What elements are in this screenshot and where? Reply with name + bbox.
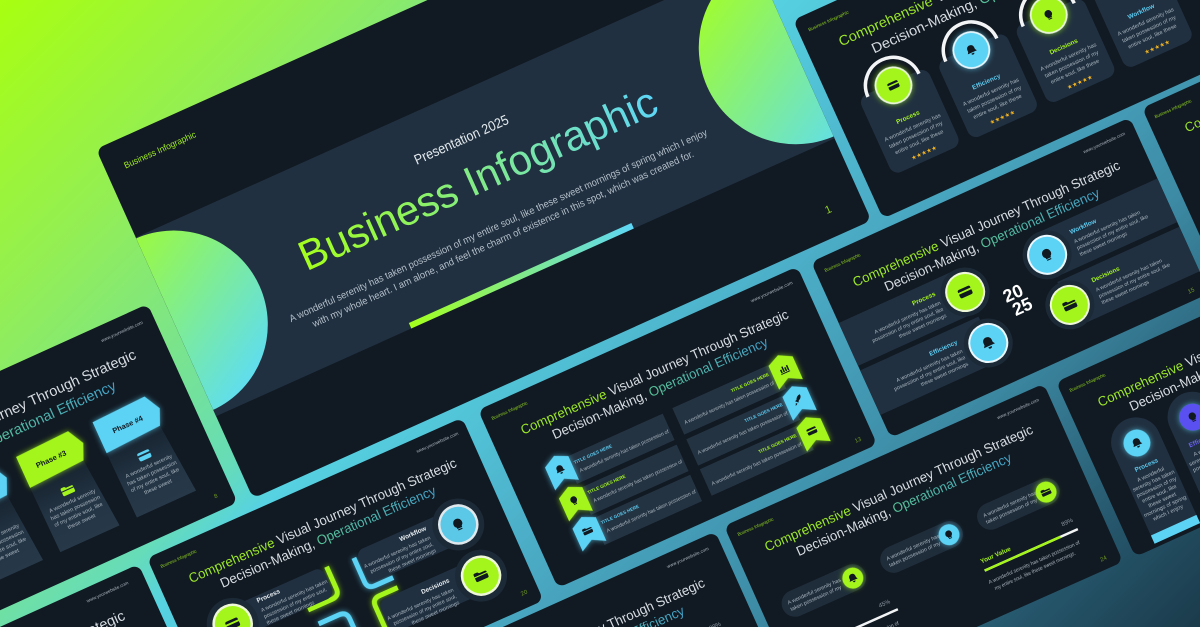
heading: Decision-Making, Operational Efficiency <box>550 334 770 442</box>
bracket: cyan top right <box>354 546 393 589</box>
left row 1 <box>542 409 672 490</box>
phase 3: Phase #3 <box>34 448 68 470</box>
panel: ribbon list slide <box>478 267 877 588</box>
pill 1: taken possession of my <box>790 585 843 613</box>
card: Process: taken possession of my <box>888 121 944 150</box>
phase 4 <box>92 393 197 518</box>
intro paragraph: with my whole heart. I am alone, and feel the charm of existence in this spot, which was created for. <box>310 149 696 330</box>
page number: 24 <box>1099 555 1109 564</box>
panel: cards slide, top right <box>793 0 1200 219</box>
node: Efficiency: A wonderful serenity has taken <box>896 349 964 384</box>
brand label: Business Infographic <box>737 516 775 537</box>
card: Process: Process <box>895 109 921 126</box>
heading: Comprehensive Visual Journey Through Strategic <box>850 158 1123 290</box>
panel: 2025 slide <box>811 117 1200 438</box>
item: Process: possession of my entire soul, <box>263 587 328 620</box>
right row 1: TITLE GOES HERE <box>730 372 770 393</box>
node: Efficiency <box>883 311 1021 409</box>
progress: 45% <box>799 598 904 627</box>
year: 20 <box>1000 280 1026 307</box>
year <box>1000 279 1036 321</box>
phase 3: these sweet <box>67 513 97 531</box>
progress: 45%: 45% <box>878 599 892 610</box>
overline: Presentation 2025 <box>411 111 511 168</box>
heading <box>435 575 714 627</box>
accent bar <box>409 223 634 329</box>
pill 3: A wonderful serenity has <box>982 490 1038 519</box>
right row 1 <box>675 350 803 431</box>
bracket: cyan bottom left <box>319 611 361 627</box>
left row 2: TITLE GOES HERE <box>587 474 626 495</box>
right row 2: A wonderful serenity has taken possession of <box>697 410 789 456</box>
panel: bracket slide <box>147 418 544 627</box>
phase 4: these sweet <box>144 478 174 496</box>
panel: progress slide <box>724 384 1123 627</box>
pillar: Process: which I enjoy <box>1151 504 1184 523</box>
item: Decisions: possession of my entire soul, <box>393 594 458 627</box>
node: Workflow: Workflow <box>1069 218 1098 236</box>
node: Process: these sweet mornings <box>898 313 948 340</box>
card: Workflow: A wonderful serenity has <box>1117 7 1175 38</box>
panel: bottom middle slide <box>396 532 795 627</box>
pill 3: taken possession of my <box>985 498 1039 526</box>
right row 3 <box>703 412 831 493</box>
card: Workflow: Workflow <box>1127 3 1156 21</box>
card: Process: entire soul, like these <box>894 129 945 156</box>
heading: Decision-Making, Operational Efficiency <box>794 450 1014 559</box>
item: Workflow: these sweet mornings <box>388 548 438 575</box>
pillar: Process: possession of my <box>1136 476 1178 500</box>
bracket: lime top left <box>295 567 340 610</box>
card: Efficiency: taken possession of my <box>967 85 1023 115</box>
item: Decisions <box>375 541 515 627</box>
node: Process: Process <box>911 291 937 307</box>
icon: card <box>137 449 152 462</box>
website: www.yourwebsite.com <box>100 320 144 343</box>
pillar: Process: these sweet <box>1148 492 1178 509</box>
card: Decisions: ★★★★★ <box>1066 74 1094 91</box>
main heading: Business Infographic <box>291 78 664 280</box>
progress: 89%: my entire soul, like these sweet mornings. <box>994 551 1077 592</box>
progress: 89% <box>979 517 1088 593</box>
item: Workflow <box>352 490 493 591</box>
node: Workflow: these sweet mornings <box>1079 231 1129 258</box>
page number: 1 <box>823 203 834 217</box>
website: www.yourwebsite.com <box>1082 131 1126 154</box>
left gradient circle <box>136 230 268 410</box>
phase 3: has taken possession <box>50 495 101 522</box>
heading <box>0 347 147 513</box>
heading: Comprehensive Visual Journey Through Strategic <box>518 307 791 437</box>
phase 2 <box>0 462 44 587</box>
left row 2 <box>556 440 686 521</box>
heading: Comprehensive Visual Journey Through Strategic <box>762 422 1035 554</box>
card: Process <box>848 44 961 176</box>
brand label: Business Infographic <box>491 400 529 421</box>
card: Workflow: ★★★★★ <box>1143 39 1171 56</box>
item: Decisions: Decisions <box>420 577 451 596</box>
node: Decisions: these sweet mornings <box>1101 279 1151 306</box>
card: Workflow: entire soul, like these <box>1127 23 1178 51</box>
phase 3: of my entire soul, like <box>54 502 104 529</box>
small brand label: Business Infographic <box>122 129 198 170</box>
card: Workflow <box>1085 0 1195 70</box>
pillar: Process: A wonderful <box>1136 466 1165 484</box>
left row 1: TITLE GOES HERE <box>573 444 613 465</box>
panel: phases slide <box>0 304 238 627</box>
item: Workflow: A wonderful serenity has taken <box>363 535 432 570</box>
card: Efficiency: Efficiency <box>971 73 1002 92</box>
left row 3: TITLE GOES HERE <box>600 504 640 525</box>
website: www.yourwebsite.com <box>996 397 1040 420</box>
panel: bottom left slide <box>0 564 228 627</box>
node: Efficiency: these sweet mornings <box>920 361 970 388</box>
progress: 89%: 89% <box>1061 518 1075 528</box>
heading <box>836 0 1142 67</box>
phase 4: A wonderful serenity <box>125 454 173 480</box>
card: Process: ★★★★★ <box>910 144 938 162</box>
pill 1 <box>777 560 870 621</box>
card: Decisions: A wonderful serenity has <box>1040 42 1098 73</box>
website: www.yourwebsite.com <box>750 280 794 303</box>
card: Decisions: Decisions <box>1049 37 1079 56</box>
brand label: Business Infographic <box>807 9 850 32</box>
brand label: Business Infographic <box>1154 98 1193 119</box>
card: Efficiency <box>926 9 1040 140</box>
title band <box>136 0 835 416</box>
pillar: Process: mornings of spring <box>1143 495 1188 519</box>
node: Efficiency: possession of my entire soul, like <box>893 355 967 393</box>
list rows <box>565 362 814 545</box>
card: Workflow: taken possession of my <box>1121 15 1177 44</box>
right row 2 <box>689 381 817 462</box>
item: Process: Process <box>256 588 282 605</box>
page number: 8 <box>213 493 219 500</box>
pill 2: taken possession of my <box>888 541 942 569</box>
heading: Decision-Making, Operational Efficiency <box>218 483 438 591</box>
heading: Decision-Making, Operational Efficiency <box>882 185 1102 294</box>
card: Decisions <box>1003 0 1117 105</box>
brand label: Business Infographic <box>824 252 862 273</box>
pillar: Process: Process <box>1134 457 1160 474</box>
page number: 20 <box>520 589 529 598</box>
pillar: Process: entire soul, like <box>1141 484 1178 505</box>
node: Workflow: A wonderful serenity has taken <box>1073 210 1141 245</box>
node: Process: possession of my entire soul, like <box>871 307 945 344</box>
website: www.yourwebsite.com <box>666 546 710 569</box>
left row 3: A wonderful serenity has taken possession of <box>606 489 697 534</box>
item: Decisions: these sweet mornings <box>411 600 461 627</box>
brand label: Business Infographic <box>160 548 198 569</box>
right row 2: TITLE GOES HERE <box>744 402 783 423</box>
intro paragraph: A wonderful serenity has taken possession of my entire soul, like these sweet mornings of spring which I enjoy <box>288 128 709 325</box>
item: Process <box>198 558 339 627</box>
pillar: Process: serenity has taken <box>1132 469 1176 494</box>
phase 4: has taken possession <box>126 460 178 488</box>
card: Efficiency: A wonderful serenity has <box>962 77 1020 108</box>
card: Efficiency: ★★★★★ <box>989 109 1016 127</box>
pill 2 <box>876 517 967 577</box>
phase 3: A wonderful serenity <box>48 488 97 515</box>
page number: 13 <box>854 436 863 445</box>
right row 1: A wonderful serenity has taken possession of <box>683 380 776 426</box>
website: www.yourwebsite.com <box>86 580 129 604</box>
progress: 89%: Your Value <box>979 546 1012 565</box>
node: Workflow <box>1015 188 1155 287</box>
node: Workflow: possession of my entire soul, like <box>1076 214 1149 252</box>
node: Process: A wonderful serenity has taken <box>874 300 942 336</box>
page number: 15 <box>1187 287 1196 296</box>
card: Decisions: taken possession of my <box>1044 50 1100 80</box>
website: www.yourwebsite.com <box>416 431 459 454</box>
pillar: Efficiency <box>1159 384 1200 518</box>
brand label: Business Infographic <box>1069 372 1107 393</box>
phase 3 <box>15 427 120 553</box>
node: Decisions: possession of my entire soul, like <box>1098 262 1171 300</box>
item: Workflow: possession of my entire soul, <box>370 542 434 575</box>
left row 1: A wonderful serenity has taken possession of <box>579 429 670 474</box>
item: Process: these sweet mornings <box>266 600 316 627</box>
node: Efficiency: Efficiency <box>928 339 959 358</box>
left row 2: A wonderful serenity has taken possession of <box>592 459 684 504</box>
panel: pillar slide <box>1056 237 1200 557</box>
card: Decisions: entire soul, like these <box>1050 58 1100 86</box>
panel: far right slide <box>1142 0 1200 286</box>
icon: folder <box>60 483 76 497</box>
right row 3: A wonderful serenity has taken possession of <box>711 441 803 487</box>
pill 2: A wonderful serenity has <box>886 533 941 562</box>
rows <box>839 178 1200 416</box>
phase 4: Phase #4 <box>111 413 145 435</box>
bracket: lime bottom right <box>372 588 412 627</box>
pill 3 <box>973 474 1064 534</box>
card: Process: A wonderful serenity has <box>884 113 942 143</box>
left row 3 <box>570 470 699 552</box>
node: Decisions: Decisions <box>1091 265 1121 284</box>
progress: 89%: A wonderful serenity has taken possession of <box>988 540 1081 586</box>
item: Process: A wonderful serenity has taken <box>260 579 329 614</box>
pill 1: A wonderful serenity has <box>787 577 842 606</box>
year: 25 <box>1009 293 1036 320</box>
pillar: Process <box>1103 409 1200 544</box>
panel: main title slide <box>98 0 869 496</box>
node: Decisions: A wonderful serenity has taken <box>1095 258 1163 293</box>
heading: Comprehensive Visual Journey Through Strategic <box>186 455 459 586</box>
right row 3: TITLE GOES HERE <box>758 433 797 454</box>
node: Process <box>860 260 998 358</box>
node: Decisions <box>1037 238 1178 337</box>
item: Decisions: A wonderful serenity has taken <box>386 587 455 622</box>
card: Efficiency: entire soul, like these <box>973 94 1023 121</box>
item: Workflow: Workflow <box>399 525 428 543</box>
right gradient circle <box>698 0 834 144</box>
phase 4: of my entire soul, like <box>130 467 180 494</box>
